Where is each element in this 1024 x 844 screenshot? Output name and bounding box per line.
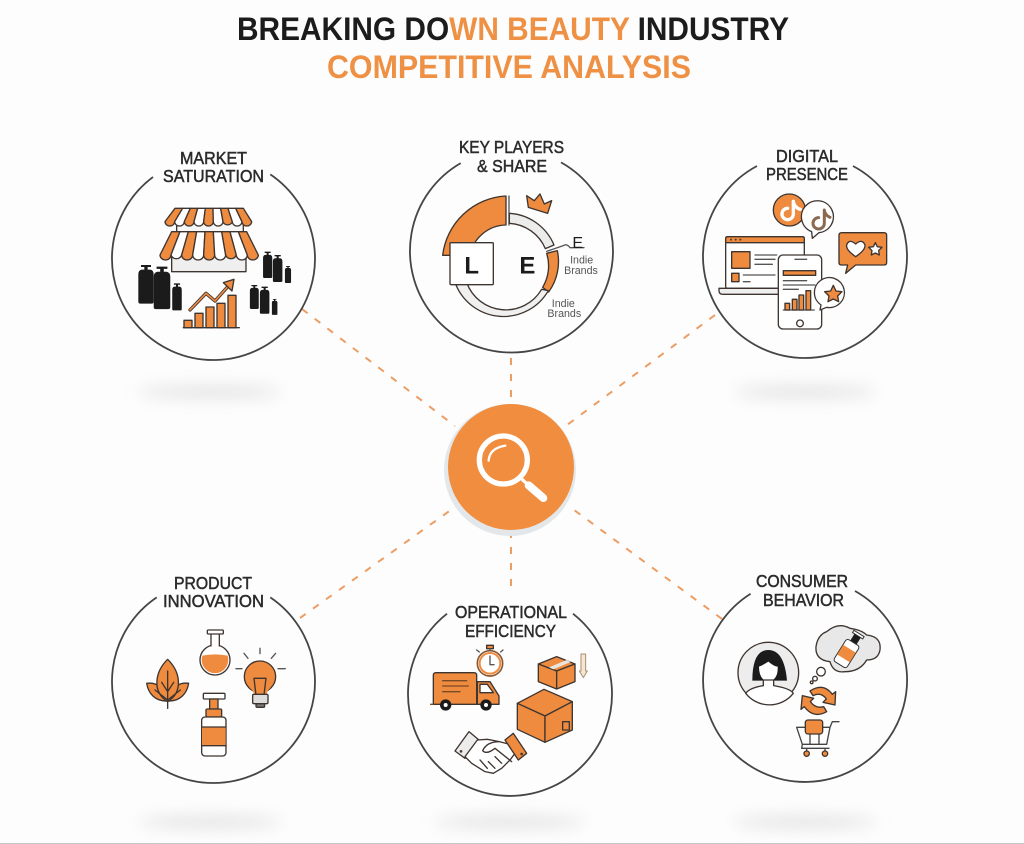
heading: operational efficiency: OPERATIONAL xyxy=(455,602,567,622)
panel: operational efficiency xyxy=(408,602,612,796)
heading: key players and share xyxy=(459,137,564,176)
dashed connectors xyxy=(300,309,722,619)
panel: consumer behavior xyxy=(703,571,907,782)
chart: market share donut: L xyxy=(464,252,479,279)
heading: digital presence: PRESENCE xyxy=(766,164,848,184)
icon: shopper, thought bubble, cycle and cart xyxy=(738,626,880,756)
heading: product innovation: INNOVATION xyxy=(163,591,264,611)
icon: magnifying glass xyxy=(479,436,543,498)
panel: product innovation xyxy=(112,573,315,783)
heading: digital presence xyxy=(766,146,848,184)
heading: digital presence: DIGITAL xyxy=(776,146,838,166)
chart: market share donut: E xyxy=(572,235,583,252)
heading: product innovation: PRODUCT xyxy=(174,573,252,593)
icon: truck, stopwatch, boxes and handshake xyxy=(431,645,587,773)
heading: market saturation: SATURATION xyxy=(163,166,264,186)
chart: market share donut: Brands xyxy=(547,308,581,320)
title: COMPETITIVE ANALYSIS xyxy=(327,49,691,85)
heading: market saturation xyxy=(163,148,264,186)
heading: product innovation xyxy=(163,573,264,611)
icon: laptop, phone and social bubbles xyxy=(719,194,887,329)
chart: market share donut: Brands xyxy=(564,265,598,277)
chart: market share donut: Indie xyxy=(552,298,575,310)
icon: leaf, flask, bulb and pump bottle xyxy=(147,630,285,756)
heading: consumer behavior xyxy=(756,571,848,610)
chart: market share donut: Indie xyxy=(570,255,593,267)
heading: market saturation: MARKET xyxy=(180,148,247,168)
panel: market saturation xyxy=(112,148,315,360)
floor shadows xyxy=(138,387,877,827)
icon: storefront, bottles and growth chart xyxy=(138,208,291,328)
heading: key players and share: KEY PLAYERS xyxy=(459,137,564,157)
panel: key players and share xyxy=(410,137,613,352)
heading: operational efficiency xyxy=(455,602,567,641)
chart: market share donut xyxy=(443,194,598,320)
title: BREAKING DOWN BEAUTY INDUSTRY xyxy=(237,11,789,47)
center magnifier hub xyxy=(444,404,576,536)
heading: key players and share: & SHARE xyxy=(477,156,547,176)
panel: digital presence xyxy=(703,146,907,358)
heading: operational efficiency: EFFICIENCY xyxy=(465,621,556,641)
chart: market share donut: E xyxy=(519,252,535,279)
title xyxy=(237,11,789,85)
heading: consumer behavior: BEHAVIOR xyxy=(763,590,844,610)
heading: consumer behavior: CONSUMER xyxy=(756,571,848,591)
